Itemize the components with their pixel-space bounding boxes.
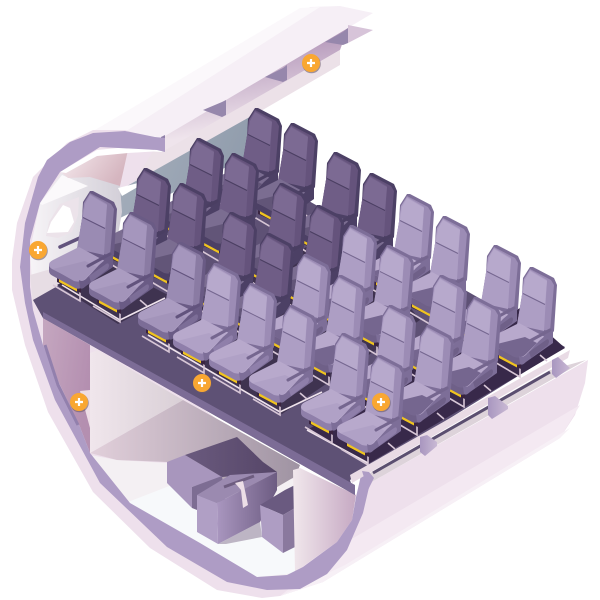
floor: cabin deck: [33, 172, 565, 495]
hotspot badge: overhead bin: [302, 54, 321, 73]
panel: upper fuselage and overhead bins: [90, 6, 373, 190]
seat 4H: [489, 267, 557, 377]
bin rear flange: [348, 25, 373, 43]
hold rear wall: [90, 400, 300, 500]
outer skin upper panel: [90, 6, 373, 138]
seats: row 3: [156, 138, 501, 407]
seat 3F: [346, 245, 414, 355]
seats: row 1: [49, 191, 405, 465]
seat 3B: [191, 153, 259, 263]
dark floor under middle block: [152, 225, 420, 414]
hold side mauve: [43, 318, 90, 453]
hotspot badge: cabin wall: [29, 241, 48, 260]
seat 3G: [399, 275, 467, 385]
panel: left cabin wall with window: [30, 147, 162, 310]
strap: [235, 481, 248, 508]
hotspot badge: floor: [193, 374, 212, 393]
seat 3H: [433, 297, 501, 407]
seat 2H: [386, 325, 454, 435]
seat 1C: [138, 242, 206, 352]
seat 1F: [249, 305, 317, 415]
ceiling wing panel: [62, 150, 128, 186]
seat 2G: [348, 305, 416, 415]
panel: lower cargo hold: [43, 318, 356, 577]
seat 4A: [214, 108, 282, 218]
seat 3A: [156, 138, 224, 248]
right hold panel: [293, 468, 356, 572]
dark floor under left pair: [57, 260, 170, 324]
seat rails: [62, 285, 368, 463]
cargo box right: [260, 485, 295, 553]
seat 2D: [226, 233, 294, 343]
seat 2B: [139, 183, 207, 293]
ring inner shade line: [45, 345, 78, 425]
seats: row 2: [103, 168, 454, 435]
cargo box front: [197, 472, 277, 544]
back wall behind seats: [120, 110, 262, 218]
seat 2F: [298, 275, 366, 385]
seat 3C: [239, 183, 307, 293]
seat 1E: [209, 283, 277, 393]
seat 2C: [189, 212, 257, 322]
seat 4B: [250, 123, 318, 233]
hotspot badge: seat: [372, 393, 391, 412]
seat 1A left armrest: [60, 237, 82, 247]
seats: row 4: [214, 108, 557, 377]
seat 4F: [402, 216, 470, 326]
dark floor under right block: [307, 308, 565, 464]
seat 4E: [366, 194, 434, 304]
right sill with rail and posts: [350, 350, 586, 490]
seat 1D: [173, 263, 241, 373]
lower bin face: [118, 50, 340, 190]
overhead bin underside: [165, 28, 348, 152]
seat 4D: [329, 173, 397, 283]
seat 1G: [301, 333, 369, 443]
seat 1A: [49, 191, 117, 301]
cargo box shadow: [218, 522, 262, 544]
window: [46, 197, 79, 238]
seat 1B: [89, 212, 157, 322]
seat 3D: [276, 205, 344, 315]
seat 4G: [453, 245, 521, 355]
cargo box rear: [167, 437, 277, 510]
hotspot badge: fuselage: [70, 393, 89, 412]
seat 2A: [103, 168, 171, 278]
seat 1H: [337, 355, 405, 465]
seat 4C: [293, 152, 361, 262]
hold floor: [90, 455, 300, 577]
seat 2E: [263, 254, 331, 364]
ribs: [203, 100, 226, 117]
seat 3E: [309, 225, 377, 335]
panel: lower hull exterior: [12, 130, 588, 598]
fuselage ring: [20, 131, 370, 590]
